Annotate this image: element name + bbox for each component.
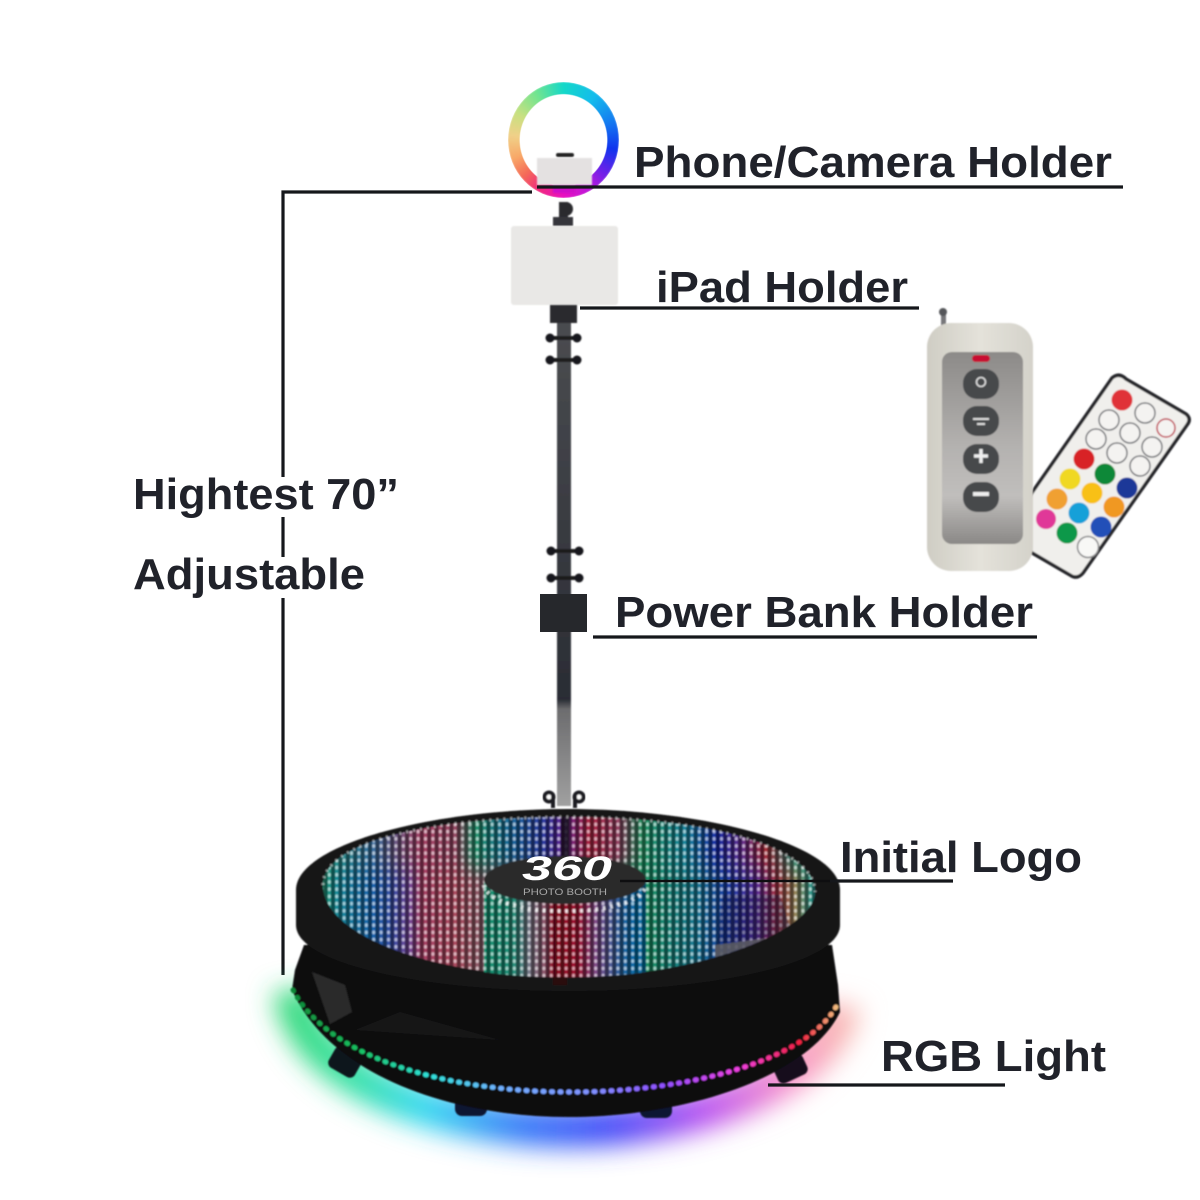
label: iPad holder: iPad Holder: [656, 263, 908, 312]
infinity mirror: [320, 812, 820, 982]
lower base with feet: [292, 945, 840, 1118]
phone / camera holder: [537, 153, 592, 193]
label: initial logo: Initial Logo: [840, 833, 1082, 882]
rotating platform: [292, 809, 840, 1118]
remote control: RF with antenna: [927, 308, 1033, 571]
center column: [484, 856, 646, 977]
label: RGB light: RGB Light: [881, 1032, 1106, 1081]
product diagram: [134, 146, 1192, 1170]
initial logo: PHOTO BOOTH: [523, 887, 607, 898]
label: power bank holder: Power Bank Holder: [615, 588, 1033, 637]
icon: RGB ring light: [508, 82, 619, 198]
label: phone/camera holder: Phone/Camera Holder: [634, 138, 1112, 187]
ball head mount: [553, 202, 573, 226]
label: adjustable: Adjustable: [133, 550, 365, 599]
height dimension line: [283, 192, 532, 975]
power bank holder: [540, 594, 587, 632]
adjustable tripod pole: [544, 305, 584, 808]
initial logo: 360: [522, 850, 612, 888]
leader lines: [537, 187, 1123, 1085]
label: height: Hightest 70”: [133, 470, 399, 519]
iPad holder: [511, 226, 618, 305]
RGB LED strip: [293, 990, 838, 1092]
base glow: [292, 990, 842, 1128]
upper plate: [296, 809, 840, 991]
initial logo: [522, 850, 612, 898]
remote control: color IR: [1005, 375, 1189, 577]
